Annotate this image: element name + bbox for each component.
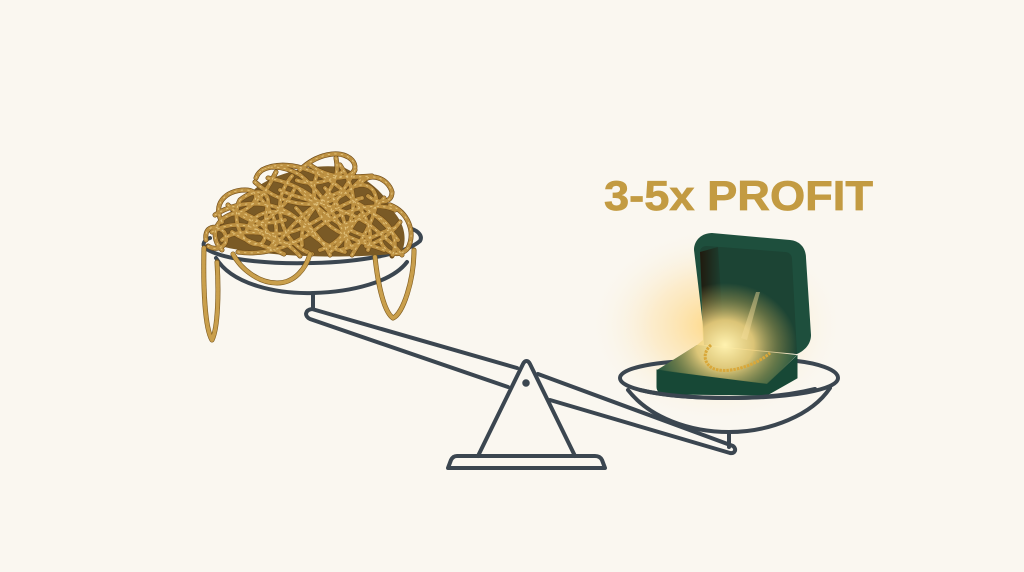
- light streak: [741, 292, 760, 340]
- beam: [306, 309, 735, 453]
- lid interior: [700, 246, 797, 354]
- base top surface: [657, 345, 797, 384]
- glow behind box: [588, 227, 844, 423]
- fulcrum: [448, 361, 605, 468]
- light burst: [661, 285, 794, 384]
- title: 3-5x PROFIT: 3-5x PROFIT: [604, 172, 873, 219]
- base front: [657, 356, 797, 395]
- pile shadow mass: [214, 166, 405, 256]
- jewelry box: [653, 233, 811, 407]
- left pan: [204, 229, 421, 309]
- right pan front rim over box: [640, 389, 815, 398]
- necklace: [705, 345, 770, 370]
- balance scale: [204, 229, 838, 468]
- right pan: [620, 361, 838, 447]
- gold chain pile: [204, 154, 414, 340]
- lid: [694, 233, 811, 354]
